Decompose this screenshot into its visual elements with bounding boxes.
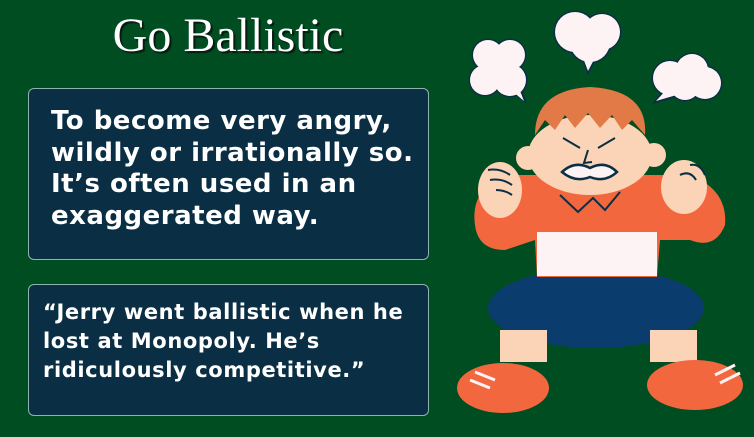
panel: definition: To become very angry, <box>51 106 392 136</box>
panel: definition: wildly or irrationally so. <box>51 138 414 168</box>
panel: example sentence <box>28 284 429 416</box>
panel: definition: exaggerated way. <box>51 200 319 230</box>
panel: example sentence: ridiculously competitive.” <box>43 358 365 382</box>
icon: speech bubble left <box>468 38 528 104</box>
figure body <box>457 87 743 413</box>
title: Go Ballistic <box>113 9 343 62</box>
panel: example sentence: lost at Monopoly. He’s <box>43 329 320 353</box>
icon: speech bubble middle <box>554 10 622 75</box>
panel: definition: It’s often used in an <box>51 169 357 199</box>
panel: definition <box>28 88 429 260</box>
icon: speech bubble right <box>652 52 722 104</box>
panel: example sentence: “Jerry went ballistic when he <box>43 300 403 324</box>
